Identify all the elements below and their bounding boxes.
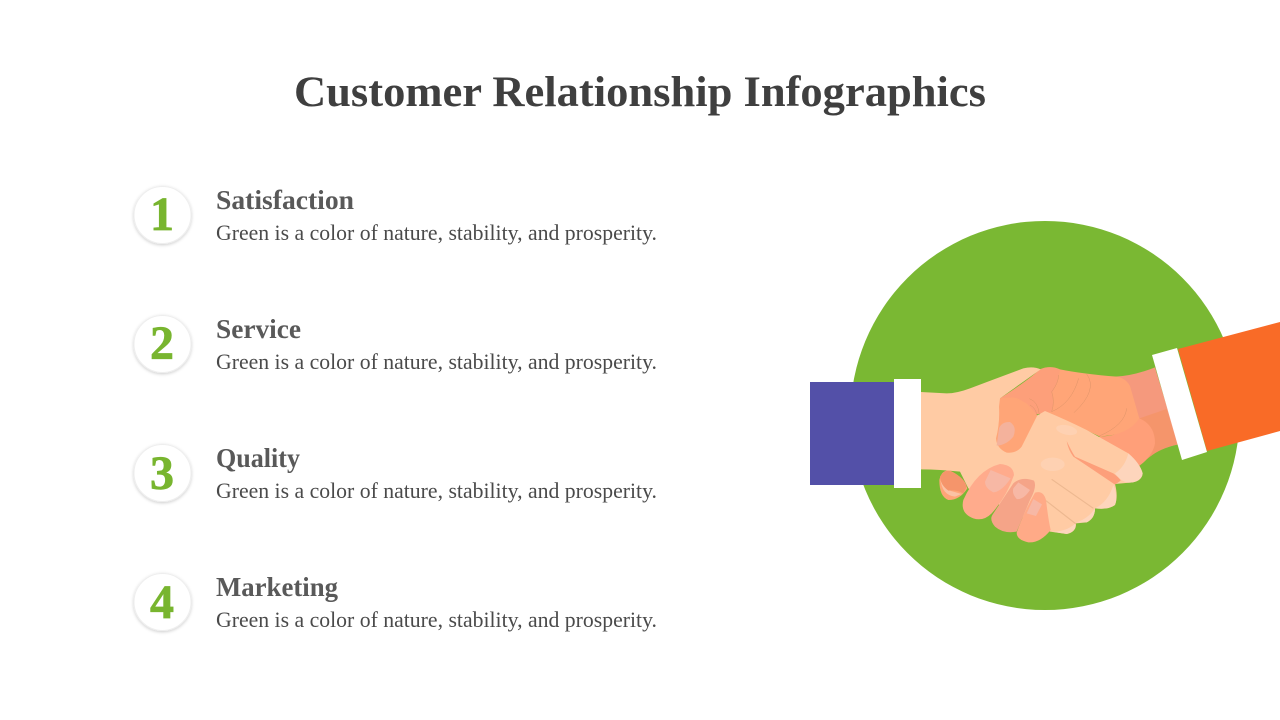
number badge 2: 2	[150, 317, 174, 370]
green circle background	[850, 221, 1240, 610]
finger 2	[991, 479, 1035, 532]
item 2: Service	[134, 314, 657, 374]
heading: Service: Service	[216, 314, 301, 344]
heading: Marketing: Marketing	[216, 572, 338, 602]
blue sleeve	[810, 382, 894, 485]
finger 1	[963, 464, 1014, 519]
white cuff left	[894, 379, 921, 488]
title: Customer Relationship Infographics	[294, 69, 986, 116]
thumbnail	[997, 422, 1015, 446]
number badge 3	[134, 444, 191, 502]
fingertip highlights	[1052, 453, 1143, 534]
number badge 1: 1	[150, 188, 174, 241]
item 4: Marketing	[134, 572, 657, 632]
number badge 2	[134, 316, 191, 372]
icon: handshake illustration	[921, 367, 1178, 542]
white cuff right	[1152, 348, 1207, 460]
left hand	[921, 367, 1143, 534]
item 3: Quality	[134, 443, 657, 503]
heading: Quality: Quality	[216, 443, 300, 473]
finger gap shadow	[1067, 441, 1121, 485]
item 1: Satisfaction	[134, 185, 657, 245]
right wrist	[1115, 367, 1178, 470]
knuckle lines	[1029, 374, 1127, 436]
palm highlights	[1055, 423, 1078, 437]
right thumb	[996, 398, 1037, 453]
description 4: Green is a color of nature, stability, and prosperity.	[216, 607, 657, 632]
number badge 3: 3	[150, 447, 174, 500]
heading: Satisfaction: Satisfaction	[216, 185, 354, 215]
left sleeve	[810, 379, 921, 488]
number badge 4: 4	[150, 576, 174, 629]
description 1: Green is a color of nature, stability, and prosperity.	[216, 220, 657, 245]
number badge 1	[134, 186, 191, 244]
number badge 4	[134, 574, 191, 630]
right hand palm	[1000, 367, 1139, 437]
finger 3	[1017, 492, 1051, 542]
description 2: Green is a color of nature, stability, and prosperity.	[216, 349, 657, 374]
orange sleeve	[1178, 322, 1280, 451]
right sleeve	[1152, 322, 1280, 460]
lower thumb	[939, 471, 967, 500]
knuckle band	[1000, 367, 1060, 415]
description 3: Green is a color of nature, stability, and prosperity.	[216, 478, 657, 503]
finger creases	[1046, 479, 1093, 524]
